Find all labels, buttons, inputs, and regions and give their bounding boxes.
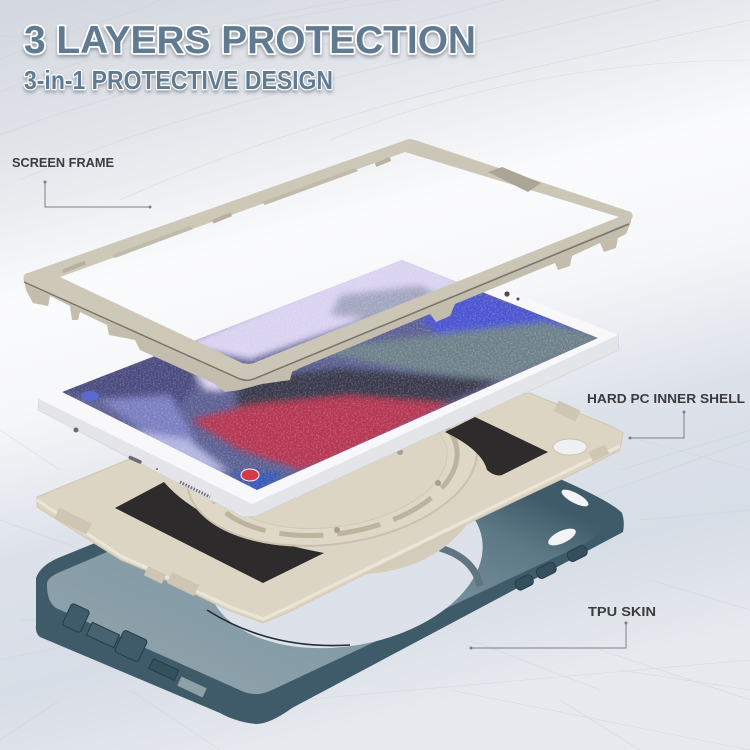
rotating stand disc below shell [252,399,492,591]
home icons [81,391,99,401]
black pad left [115,482,324,583]
TPU outer body [36,460,624,724]
wallpaper speckle [62,260,598,490]
TPU inner cavity [47,470,611,694]
frame lower lip with tabs [24,212,631,392]
layer: hard PC inner shell [37,368,623,623]
tablet face [39,253,618,504]
callout line: TPU skin [470,622,628,650]
frame recess [488,167,541,192]
shell body [37,393,623,623]
label: screen frame: SCREEN FRAME [12,155,114,170]
shell raised rim [37,446,620,619]
label: TPU skin: TPU SKIN [588,604,656,619]
title: 3 LAYERS PROTECTION [24,19,476,62]
lavender area [194,260,456,364]
speaker and ports [74,428,210,497]
screen [62,260,598,490]
layer: screen frame [23,139,633,392]
frame inner tabs [62,157,391,273]
frame dark seam [24,224,629,380]
frame ring [23,139,633,380]
camera and speaker cut-outs [546,487,591,549]
rotating ring [177,368,487,564]
subtitle: 3-in-1 PROTECTIVE DESIGN [24,65,333,95]
rear hole showing background [194,455,496,669]
tablet edge [38,335,619,517]
camera opening in shell [553,439,587,455]
camera lenses [504,291,520,300]
callout line: screen frame [44,180,152,208]
side buttons [62,544,589,697]
layer: tablet [38,250,619,517]
label: hard PC inner shell: HARD PC INNER SHELL [587,391,745,406]
callout line: hard PC inner shell [628,410,686,440]
shell clips [54,400,609,596]
layer: TPU skin [36,455,624,724]
black pad right [445,417,548,475]
